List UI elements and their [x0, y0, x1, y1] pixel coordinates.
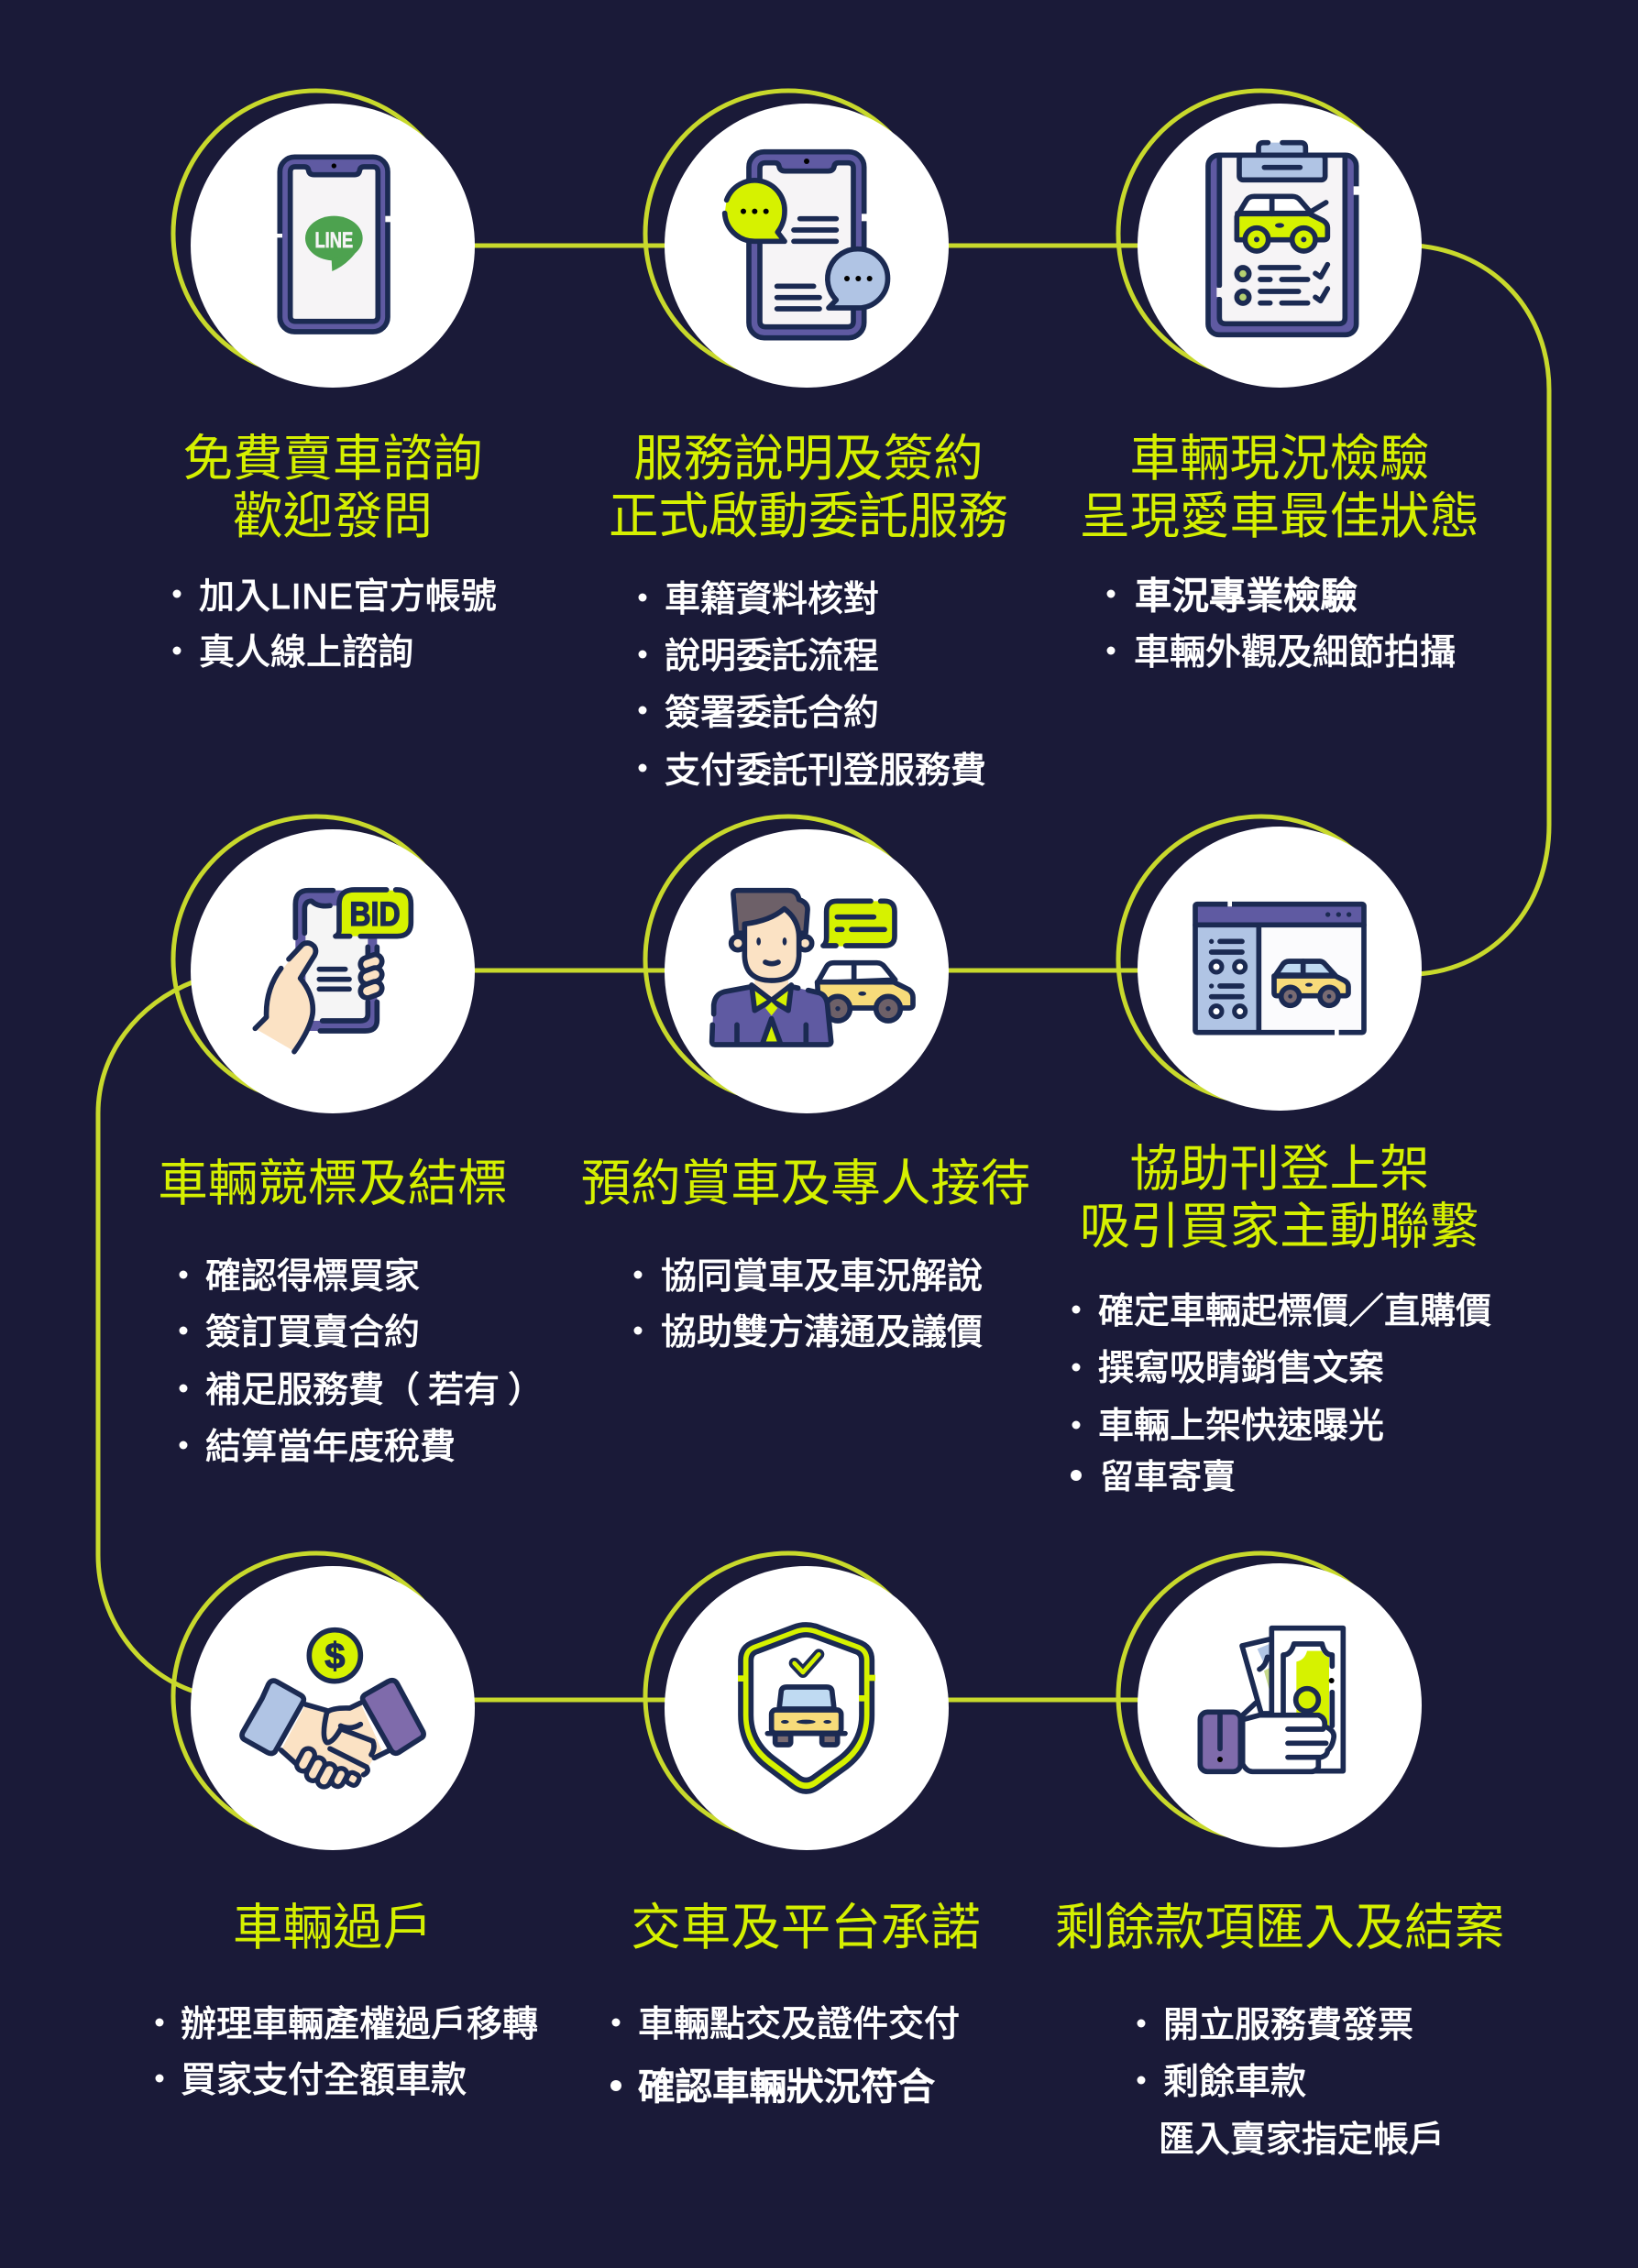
icon: handshake with dollar coin: $: [324, 1637, 345, 1677]
bullet list: step 3: 車輛外觀及細節拍攝: [1134, 633, 1456, 673]
bullet list: step 8: 確認車輛狀況符合: [638, 2065, 935, 2108]
bullet list: step 8: [610, 2005, 960, 2108]
bullet list: step 8: 車輛點交及證件交付: [638, 2005, 960, 2044]
bullet list: step 7: [156, 2005, 538, 2100]
heading: step 4: 車輛競標及結標: [158, 1156, 508, 1211]
bullet list: step 3: 車況專業檢驗: [1135, 575, 1358, 617]
bullet list: step 9: 剩餘車款: [1163, 2063, 1306, 2102]
panel: step 9 remaining payment and closing: [1055, 1553, 1504, 2160]
bullet list: step 4: 補足服務費（若有）: [205, 1371, 544, 1410]
panel: step 5 viewing appointment: [581, 816, 1030, 1353]
panel: step 8 delivery and platform promise: [610, 1553, 981, 2108]
bullet list: step 2: 車籍資料核對: [665, 580, 879, 619]
heading: step 2: 正式啟動委託服務: [609, 488, 1008, 544]
bullet list: step 7: 買家支付全額車款: [181, 2061, 467, 2100]
panel: step 1 free consultation: [172, 91, 497, 673]
connector lines between steps: [98, 246, 1549, 1700]
bullet list: step 7: 辦理車輛產權過戶移轉: [181, 2005, 538, 2044]
bullet list: step 2: 支付委託刊登服務費: [665, 751, 986, 791]
icon: salesperson with car and speech bubble: [712, 891, 913, 1045]
bullet list: step 9: [1137, 2006, 1445, 2160]
icon: browser window with car: [1195, 901, 1364, 1035]
heading: step 2: [609, 431, 1008, 544]
bullet list: step 6: 撰寫吸睛銷售文案: [1098, 1349, 1384, 1388]
panel: step 6 listing: [1071, 816, 1491, 1496]
bullet list: step 4: 確認得標買家: [205, 1257, 420, 1297]
heading: step 1: [182, 431, 483, 544]
heading: step 9: 剩餘款項匯入及結案: [1055, 1900, 1504, 1956]
heading: step 6: 吸引買家主動聯繫: [1080, 1199, 1479, 1255]
icon: hand holding phone with BID bubble: [255, 890, 411, 1052]
panel: step 3 vehicle inspection: [1080, 91, 1479, 673]
heading: step 2: 服務說明及簽約: [633, 431, 984, 487]
heading: step 1: 歡迎發問: [233, 488, 433, 544]
bullet list: step 1: 真人線上諮詢: [199, 633, 413, 673]
heading: step 1: 免費賣車諮詢: [182, 431, 483, 487]
bullet list: step 1: 加入LINE官方帳號: [199, 577, 497, 617]
bullet list: step 6: 車輛上架快速曝光: [1098, 1407, 1384, 1446]
bullet list: step 4: 簽訂買賣合約: [205, 1313, 420, 1353]
bullet list: step 1: [172, 577, 497, 673]
bullet list: step 2: 簽署委託合約: [665, 694, 879, 733]
bullet list: step 6: 確定車輛起標價／直購價: [1098, 1292, 1491, 1331]
bullet list: step 4: [180, 1257, 544, 1467]
icon: phone with LINE bubble: [277, 157, 390, 332]
heading: step 5: 預約賞車及專人接待: [581, 1156, 1030, 1211]
bullet list: step 2: 說明委託流程: [665, 637, 879, 676]
bullet list: step 9: 開立服務費發票: [1163, 2006, 1413, 2045]
heading: step 3: 車輛現況檢驗: [1129, 431, 1430, 487]
bullet list: step 5: [634, 1257, 983, 1353]
bullet list: step 9: 匯入賣家指定帳戶: [1159, 2120, 1445, 2160]
icon: hand holding phone with BID bubble: BID: [349, 894, 401, 933]
icon: handshake with dollar coin: [242, 1630, 423, 1789]
bullet list: step 4: 結算當年度稅費: [205, 1428, 456, 1467]
heading: step 3: 呈現愛車最佳狀態: [1080, 488, 1479, 544]
icon: phone with LINE bubble: LINE: [314, 228, 353, 253]
bullet list: step 5: 協助雙方溝通及議價: [661, 1313, 983, 1353]
heading: step 7: 車輛過戶: [233, 1900, 433, 1956]
bullet list: step 6: 留車寄賣: [1100, 1458, 1236, 1496]
bullet list: step 5: 協同賞車及車況解說: [661, 1257, 983, 1297]
bullet list: step 3: [1107, 575, 1456, 673]
icon: hand holding banknotes: [1200, 1628, 1343, 1771]
icon: clipboard with car: [1208, 143, 1359, 334]
heading: step 6: 協助刊登上架: [1129, 1141, 1430, 1197]
icon: shield with car: [738, 1625, 875, 1791]
heading: step 6: [1080, 1141, 1479, 1255]
bullet list: step 2: [638, 580, 986, 791]
panel: step 7 ownership transfer: [156, 1553, 538, 2100]
panel: step 4 bidding: [158, 816, 544, 1467]
bullet list: step 6: [1071, 1292, 1491, 1496]
heading: step 3: [1080, 431, 1479, 544]
icon: phone with chat bubbles: [725, 152, 887, 338]
heading: step 8: 交車及平台承諾: [631, 1900, 981, 1956]
panel: step 2 service explanation and contract: [609, 91, 1008, 791]
